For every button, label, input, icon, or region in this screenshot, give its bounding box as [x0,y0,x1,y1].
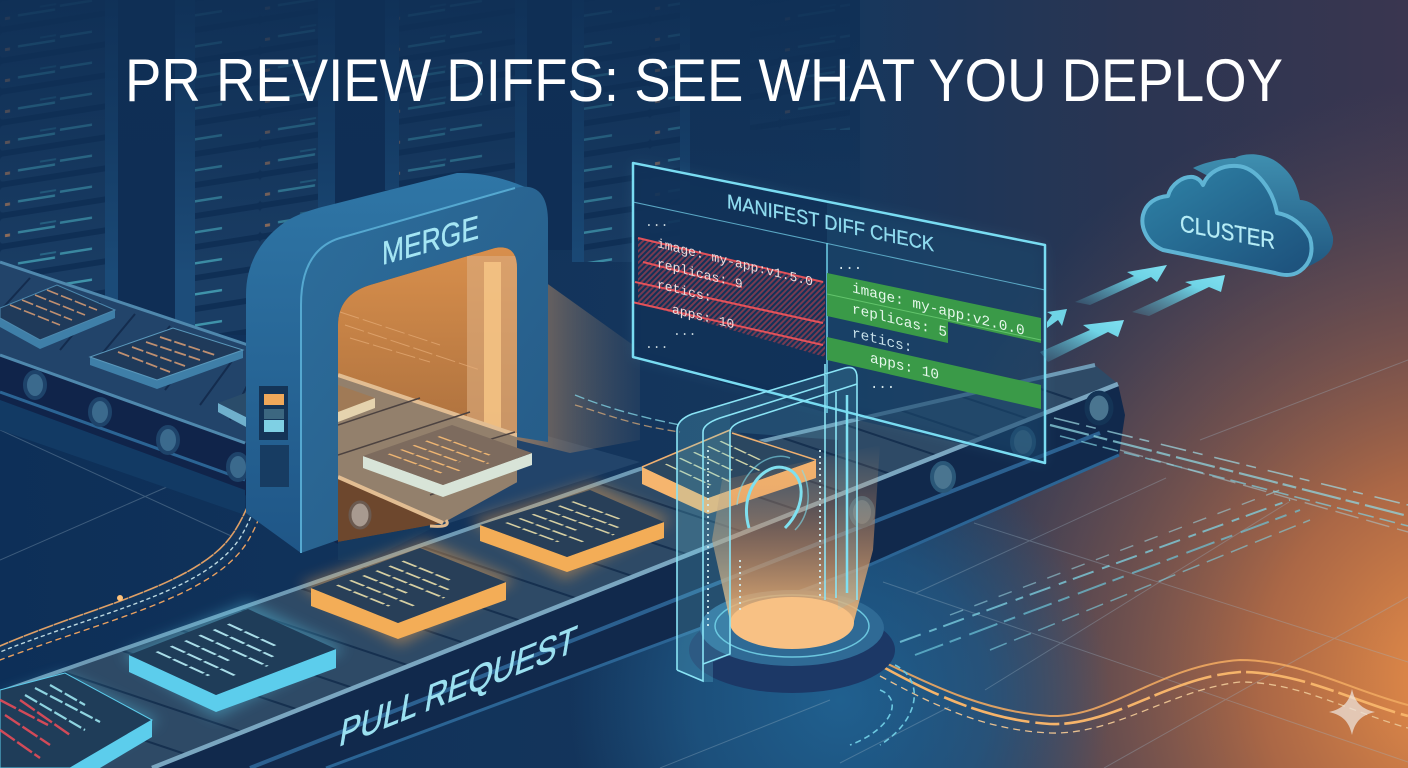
card: red diff [0,673,160,768]
removed lines: image: my-app:v1.5.0 [657,236,813,290]
server racks [0,0,860,335]
card: blue [122,602,345,718]
gate opening [338,247,517,540]
light cone [712,445,880,625]
card in opening [338,385,375,422]
data streams [575,395,1408,745]
roller [228,454,248,480]
removed lines: retics: [657,277,712,306]
removed lines: apps: 10 [672,302,734,333]
card: orange [300,540,515,645]
stream: behind panel [575,395,680,432]
cluster label: CLUSTER [1180,211,1275,255]
roller [1012,428,1034,456]
removed lines: ... [645,337,668,352]
glass window [730,367,857,610]
glowing disc [730,597,854,649]
removed lines [632,215,825,357]
belt in opening [338,377,517,523]
panel border [633,163,1045,463]
gate shadow beam [517,262,640,453]
added lines: ... [870,377,895,393]
arrow [1132,275,1225,316]
panel title: MANIFEST DIFF CHECK [727,191,934,256]
cloud front [1142,166,1312,275]
added lines [827,258,1041,409]
end roller [1087,393,1111,423]
status lights [259,386,289,487]
added lines: apps: 10 [870,351,939,384]
scanner hologram [677,364,895,693]
floor grid [0,360,1408,768]
merge label: MERGE [382,210,479,273]
merge gate [246,173,640,575]
gate front [301,187,548,553]
added lines: replicas: 5 [852,302,947,342]
cloud depth [1193,154,1333,275]
glass column [677,402,730,682]
added lines: ... [837,258,862,274]
roller [158,427,178,453]
card: orange upper [470,482,672,580]
sparkle mark [1329,689,1375,735]
belt surface [0,365,1118,768]
stream: rising dashes [900,490,1310,655]
arrow [1075,265,1167,305]
scan ring [737,456,808,530]
back belt card [90,328,243,389]
roller [851,498,873,526]
card entering gate [363,425,532,497]
light pillar [467,256,517,440]
pull request belt [0,365,1220,768]
data cable from gate [0,456,287,660]
back belt card under gate [218,392,248,428]
title: PR REVIEW DIFFS: SEE WHAT YOU DEPLOY [125,47,1283,114]
removed lines: ... [673,324,696,339]
arrows to cluster [1040,265,1225,362]
glass edges [677,364,857,681]
removed lines: ... [645,215,668,230]
belt front face [152,384,1125,768]
pedestal [689,590,895,693]
back belt card [0,285,115,349]
roller [25,372,45,398]
arrow [1040,320,1124,362]
belt rails [0,365,1095,692]
card: in scanner [642,430,816,514]
panel header line [633,202,1045,290]
manifest diff panel [632,163,1045,463]
panel divider [826,243,828,413]
roller [932,463,954,491]
stream: right of panel [1050,418,1408,532]
arrow [1047,309,1067,328]
stream: from pedestal [850,660,1408,745]
roller [90,399,110,425]
roller [350,502,370,528]
gate side and top [246,173,525,553]
cloud [1142,154,1333,275]
removed lines: replicas: 9 [657,256,743,292]
pull request label: PULL REQUEST [337,618,580,756]
added lines: retics: [852,326,912,357]
added lines: image: my-app:v2.0.0 [852,281,1025,340]
data beam dots [846,395,848,593]
back conveyor belt [0,262,640,545]
